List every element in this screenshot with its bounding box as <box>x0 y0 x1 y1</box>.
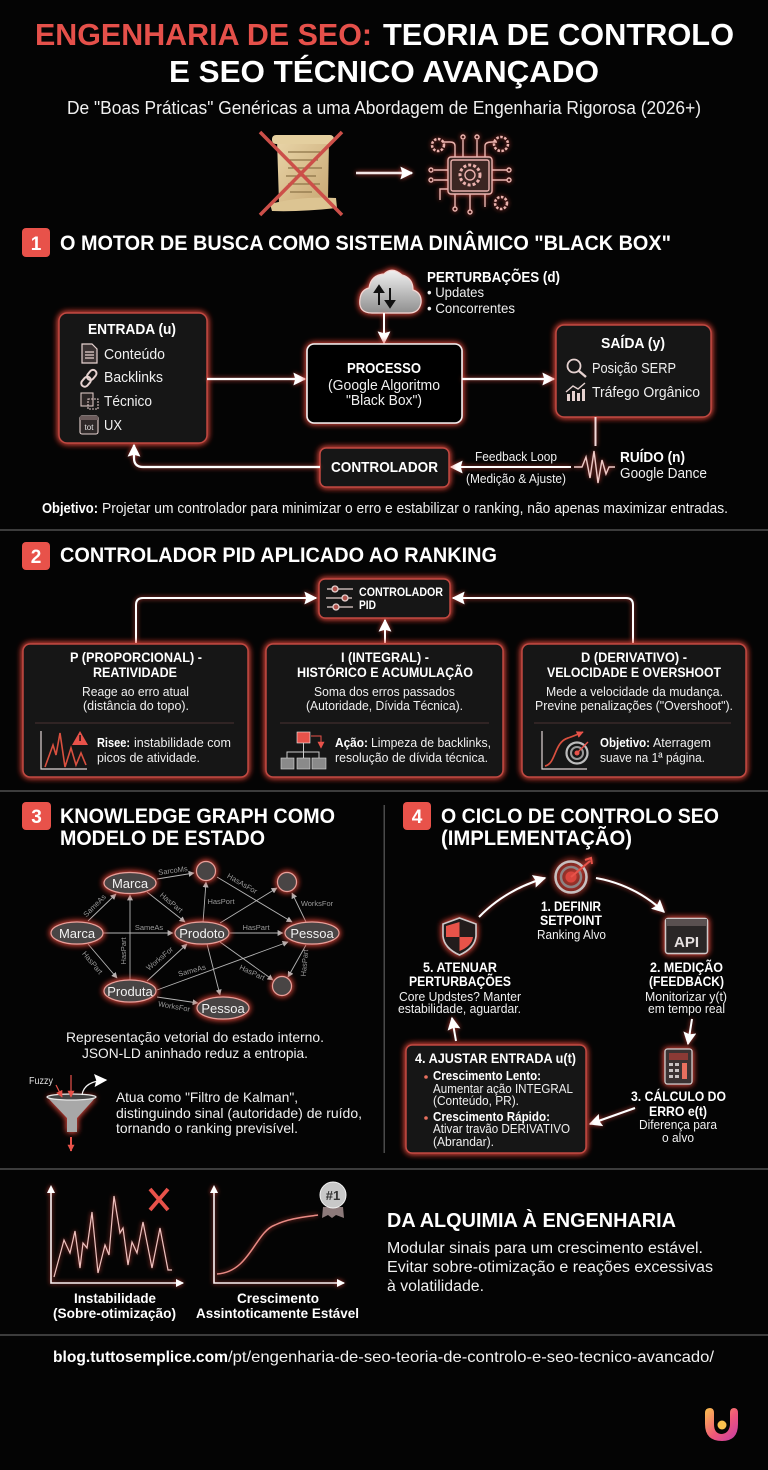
icon: target <box>556 858 592 892</box>
arrow: step 5 to 1 <box>479 878 545 917</box>
chart: stable growth <box>196 1182 359 1321</box>
arrow: controller to input <box>134 445 320 467</box>
chart: knowledge graph <box>51 862 339 1019</box>
chart: knowledge graph: Pessoa <box>290 926 334 941</box>
chart: knowledge graph: Pessoa <box>201 1001 245 1016</box>
panel: I: resolução de dívida técnica. <box>335 750 488 765</box>
chart: instability: (Sobre-otimização) <box>53 1305 176 1321</box>
arrow: disturbance to process <box>383 313 385 343</box>
panel: process: (Google Algoritmo <box>328 377 440 394</box>
panel: I: HISTÓRICO E ACUMULAÇÃO <box>297 665 473 680</box>
panel: I <box>266 644 503 777</box>
panel: step 4 adjust input: (Abrandar). <box>433 1135 494 1149</box>
conclusion text: à volatilidade. <box>387 1278 484 1295</box>
feedback loop label: Feedback Loop <box>475 449 557 464</box>
chart: knowledge graph: HasPart <box>299 948 310 977</box>
arrow: D to controller <box>453 598 633 643</box>
section 4 heading: (IMPLEMENTAÇÃO) <box>441 827 632 850</box>
panel: step 4 adjust input: Aumentar ação INTEGRAL <box>433 1082 573 1096</box>
icon: disturbance cloud <box>360 270 421 313</box>
step 3: error calculation: ERRO e(t) <box>649 1104 707 1119</box>
step 3: error calculation: o alvo <box>662 1130 694 1145</box>
objective text: Projetar um controlador para minimizar o erro e estabilizar o ranking, não apenas maximizar entradas. <box>102 501 728 517</box>
logo <box>705 1408 738 1441</box>
arrow: I to controller <box>384 620 386 643</box>
panel: input <box>59 313 207 443</box>
disturbance label <box>427 268 560 316</box>
arrow: process to output <box>462 378 554 380</box>
icon: calculator <box>665 1049 692 1084</box>
step 1: setpoint: 1. DEFINIR <box>541 899 601 914</box>
icon: medal: #1 <box>326 1188 340 1203</box>
icon: traffic chart <box>566 383 585 401</box>
panel: D: VELOCIDADE E OVERSHOOT <box>547 665 722 680</box>
section 1 heading: 1 <box>31 234 42 255</box>
panel: output: SAÍDA (y) <box>601 335 665 352</box>
panel: PID controller <box>319 579 450 618</box>
disturbance label: • Concorrentes <box>427 300 515 316</box>
chart: knowledge graph: SameAs <box>177 962 207 979</box>
icon: red cross <box>150 1189 168 1210</box>
step 1: setpoint <box>537 899 606 942</box>
step 2: measurement: 2. MEDIÇÃO <box>650 960 723 975</box>
chart: knowledge graph: HasPart <box>80 949 105 977</box>
panel: output <box>556 325 711 417</box>
panel: D: Mede a velocidade da mudança. <box>546 684 723 699</box>
panel: P: (distância do topo). <box>83 698 189 713</box>
step 2: measurement: (FEEDBACK) <box>649 974 724 989</box>
panel: step 4 adjust input: Crescimento Rápido: <box>433 1110 550 1124</box>
panel: P: instabilidade com <box>134 735 231 750</box>
section 3 heading: 3 <box>31 807 42 828</box>
icon: link <box>80 368 98 388</box>
icon: ux window: tot <box>85 423 94 432</box>
panel: P: Risee: <box>97 735 130 750</box>
section 4 heading: 4 <box>412 807 423 828</box>
chart: knowledge graph: HasAsFor <box>226 871 259 896</box>
step 1: setpoint: SETPOINT <box>540 913 603 928</box>
chart: instability <box>47 1185 184 1321</box>
disturbance label: PERTURBAÇÕES (d) <box>427 268 560 286</box>
panel: process: "Black Box") <box>346 392 422 409</box>
step 2: measurement: Monitorizar y(t) <box>645 989 727 1004</box>
panel: I: Soma dos erros passados <box>314 684 455 699</box>
panel: step 4 adjust input: Ativar travão DERIVATIVO <box>433 1122 570 1136</box>
panel: I: (Autoridade, Dívida Técnica). <box>306 698 463 713</box>
chart: stable growth: Assintoticamente Estável <box>196 1305 359 1321</box>
step 5: attenuate disturbances <box>398 960 522 1016</box>
icon: document <box>82 344 97 363</box>
text: vector state: Representação vetorial do estado interno. <box>66 1029 324 1045</box>
icon: shield <box>443 918 476 955</box>
noise label <box>620 449 707 482</box>
conclusion text <box>387 1209 713 1295</box>
section 3 heading <box>22 802 335 850</box>
section 4 heading <box>403 802 719 850</box>
chart: knowledge graph: Marca <box>59 926 96 941</box>
panel: step 4 adjust input: Crescimento Lento: <box>433 1069 541 1083</box>
icon: curve and target <box>542 731 588 769</box>
chart: knowledge graph: HasPart <box>119 937 128 965</box>
source url: /pt/engenharia-de-seo-teoria-de-controlo-e-seo-tecnico-avancado/ <box>228 1349 715 1366</box>
disturbance label: • Updates <box>427 284 484 300</box>
arrow: noise to controller <box>451 466 571 468</box>
icon: circuit chip <box>429 135 511 214</box>
panel: D <box>522 644 746 777</box>
panel: step 4 adjust input: (Conteúdo, PR). <box>433 1094 519 1108</box>
text: kalman filter: distinguindo sinal (autoridade) de ruído, <box>116 1105 362 1121</box>
feedback loop label: (Medição & Ajuste) <box>466 471 566 486</box>
panel: P: REATIVIDADE <box>93 665 177 680</box>
step 1: setpoint: Ranking Alvo <box>537 927 606 942</box>
chart: knowledge graph: WorksFor <box>301 899 334 908</box>
arrow: step 4 to 5 <box>452 1018 456 1041</box>
panel: input: Conteúdo <box>104 346 165 363</box>
text: kalman filter: tornando o ranking previsível. <box>116 1120 298 1136</box>
chart: knowledge graph: SameAs <box>135 923 163 932</box>
panel: D: Objetivo: <box>600 735 650 750</box>
text: kalman filter: Atua como "Filtro de Kalman", <box>116 1089 298 1105</box>
panel: controller: CONTROLADOR <box>331 459 438 476</box>
icon: funnel filter: Fuzzy <box>29 1075 54 1087</box>
panel: step 4 adjust input <box>406 1045 586 1153</box>
panel: D: Previne penalizações ("Overshoot"). <box>535 698 733 713</box>
chart: instability: Instabilidade <box>74 1290 156 1306</box>
title: ENGENHARIA DE SEO: <box>35 17 372 52</box>
step 5: attenuate disturbances: 5. ATENUAR <box>423 960 497 975</box>
panel: controller <box>320 448 449 487</box>
icon: ux window <box>80 416 98 434</box>
arrow: input to process <box>207 378 305 380</box>
noise label: RUÍDO (n) <box>620 449 685 466</box>
step 5: attenuate disturbances: Core Updstes? Manter <box>399 989 522 1004</box>
chart: stable growth: Crescimento <box>237 1290 319 1306</box>
title: E SEO TÉCNICO AVANÇADO <box>169 54 599 89</box>
objective text: Objetivo: <box>42 501 98 517</box>
title <box>35 17 734 89</box>
icon: API window: API <box>674 934 699 951</box>
panel: P: picos de atividade. <box>97 750 200 765</box>
section 1 heading: O MOTOR DE BUSCA COMO SISTEMA DINÂMICO "BLACK BOX" <box>60 231 671 255</box>
panel: D: Aterragem <box>653 735 711 750</box>
arrow: step 3 to 4 <box>590 1108 635 1124</box>
chart: knowledge graph: HasPart <box>242 923 270 932</box>
icon: crossed-out scroll <box>260 132 342 215</box>
arrow: old to new <box>356 172 412 174</box>
section 2 heading: 2 <box>31 547 41 568</box>
panel: process: PROCESSO <box>347 360 421 377</box>
arrow: step 1 to 2 <box>596 878 664 912</box>
panel: input: ENTRADA (u) <box>88 321 176 338</box>
chart: knowledge graph: Produta <box>107 984 154 999</box>
chart: knowledge graph: HasPort <box>207 897 235 906</box>
panel: D: D (DERIVATIVO) - <box>581 650 687 665</box>
chart: knowledge graph: WorksFor <box>157 999 191 1014</box>
arrow: P to controller <box>136 598 316 643</box>
icon: hierarchy <box>281 732 326 769</box>
section 3 heading: MODELO DE ESTADO <box>60 827 265 850</box>
panel: PID controller: PID <box>359 598 376 612</box>
panel: output: Posição SERP <box>592 360 676 377</box>
panel: input: Backlinks <box>104 369 163 386</box>
section 2 heading: CONTROLADOR PID APLICADO AO RANKING <box>60 544 497 567</box>
icon: medal <box>320 1182 346 1218</box>
conclusion text: DA ALQUIMIA À ENGENHARIA <box>387 1209 676 1232</box>
chart: knowledge graph: SameAs <box>81 892 108 919</box>
chart: knowledge graph: Marca <box>112 876 149 891</box>
panel: input: Técnico <box>104 393 152 410</box>
text: kalman filter <box>116 1089 362 1136</box>
noise label: Google Dance <box>620 465 707 482</box>
chart: knowledge graph: SarcoMs <box>158 864 188 877</box>
section 4 heading: O CICLO DE CONTROLO SEO <box>441 805 719 828</box>
panel: PID controller: CONTROLADOR <box>359 585 443 599</box>
chart: knowledge graph: Prodoto <box>179 926 225 941</box>
step 3: error calculation <box>631 1089 726 1145</box>
panel: output: Tráfego Orgânico <box>592 384 700 401</box>
title: TEORIA DE CONTROLO <box>383 17 734 52</box>
text: vector state: JSON-LD aninhado reduz a entropia. <box>82 1045 308 1061</box>
step 5: attenuate disturbances: PERTURBAÇÕES <box>409 974 511 989</box>
chart: knowledge graph: WorksFor <box>144 944 175 972</box>
icon: funnel filter <box>29 1075 106 1151</box>
panel: step 4 adjust input: 4. AJUSTAR ENTRADA u(t) <box>415 1051 576 1066</box>
panel: P <box>23 644 248 777</box>
panel: D: suave na 1ª página. <box>600 750 705 765</box>
feedback loop label <box>466 449 566 486</box>
panel: I: I (INTEGRAL) - <box>341 650 429 665</box>
section 3 heading: KNOWLEDGE GRAPH COMO <box>60 805 335 828</box>
panel: input: UX <box>104 417 122 434</box>
panel: process <box>307 344 462 423</box>
panel: P: Reage ao erro atual <box>82 684 189 699</box>
conclusion text: Modular sinais para um crescimento estável. <box>387 1240 703 1257</box>
panel: I: Ação: <box>335 735 368 750</box>
arrow: step 2 to 3 <box>688 1019 692 1044</box>
panel: I: Limpeza de backlinks, <box>371 735 491 750</box>
icon: magnifier <box>568 360 586 377</box>
step 3: error calculation: 3. CÁLCULO DO <box>631 1089 726 1104</box>
icon: unstable spikes <box>41 731 88 769</box>
icon: API window <box>666 918 708 954</box>
icon: noise waveform <box>574 451 615 483</box>
icon: sliders <box>326 586 353 610</box>
panel: P: P (PROPORCIONAL) - <box>70 650 202 665</box>
subtitle: De "Boas Práticas" Genéricas a uma Abordagem de Engenharia Rigorosa (2026+) <box>67 98 701 118</box>
source url: blog.tuttosemplice.com <box>53 1349 228 1366</box>
step 2: measurement: em tempo real <box>648 1001 725 1016</box>
conclusion text: Evitar sobre-otimização e reações excessivas <box>387 1259 713 1276</box>
connector: output to noise <box>594 417 596 446</box>
icon: technical <box>81 393 98 409</box>
chart: knowledge graph: HasPart <box>158 890 185 915</box>
text: vector state <box>66 1029 324 1061</box>
step 5: attenuate disturbances: estabilidade, aguardar. <box>398 1001 521 1016</box>
chart: knowledge graph: HasPart <box>238 963 267 983</box>
step 2: measurement <box>645 960 727 1016</box>
step 3: error calculation: Diferença para <box>639 1117 718 1132</box>
